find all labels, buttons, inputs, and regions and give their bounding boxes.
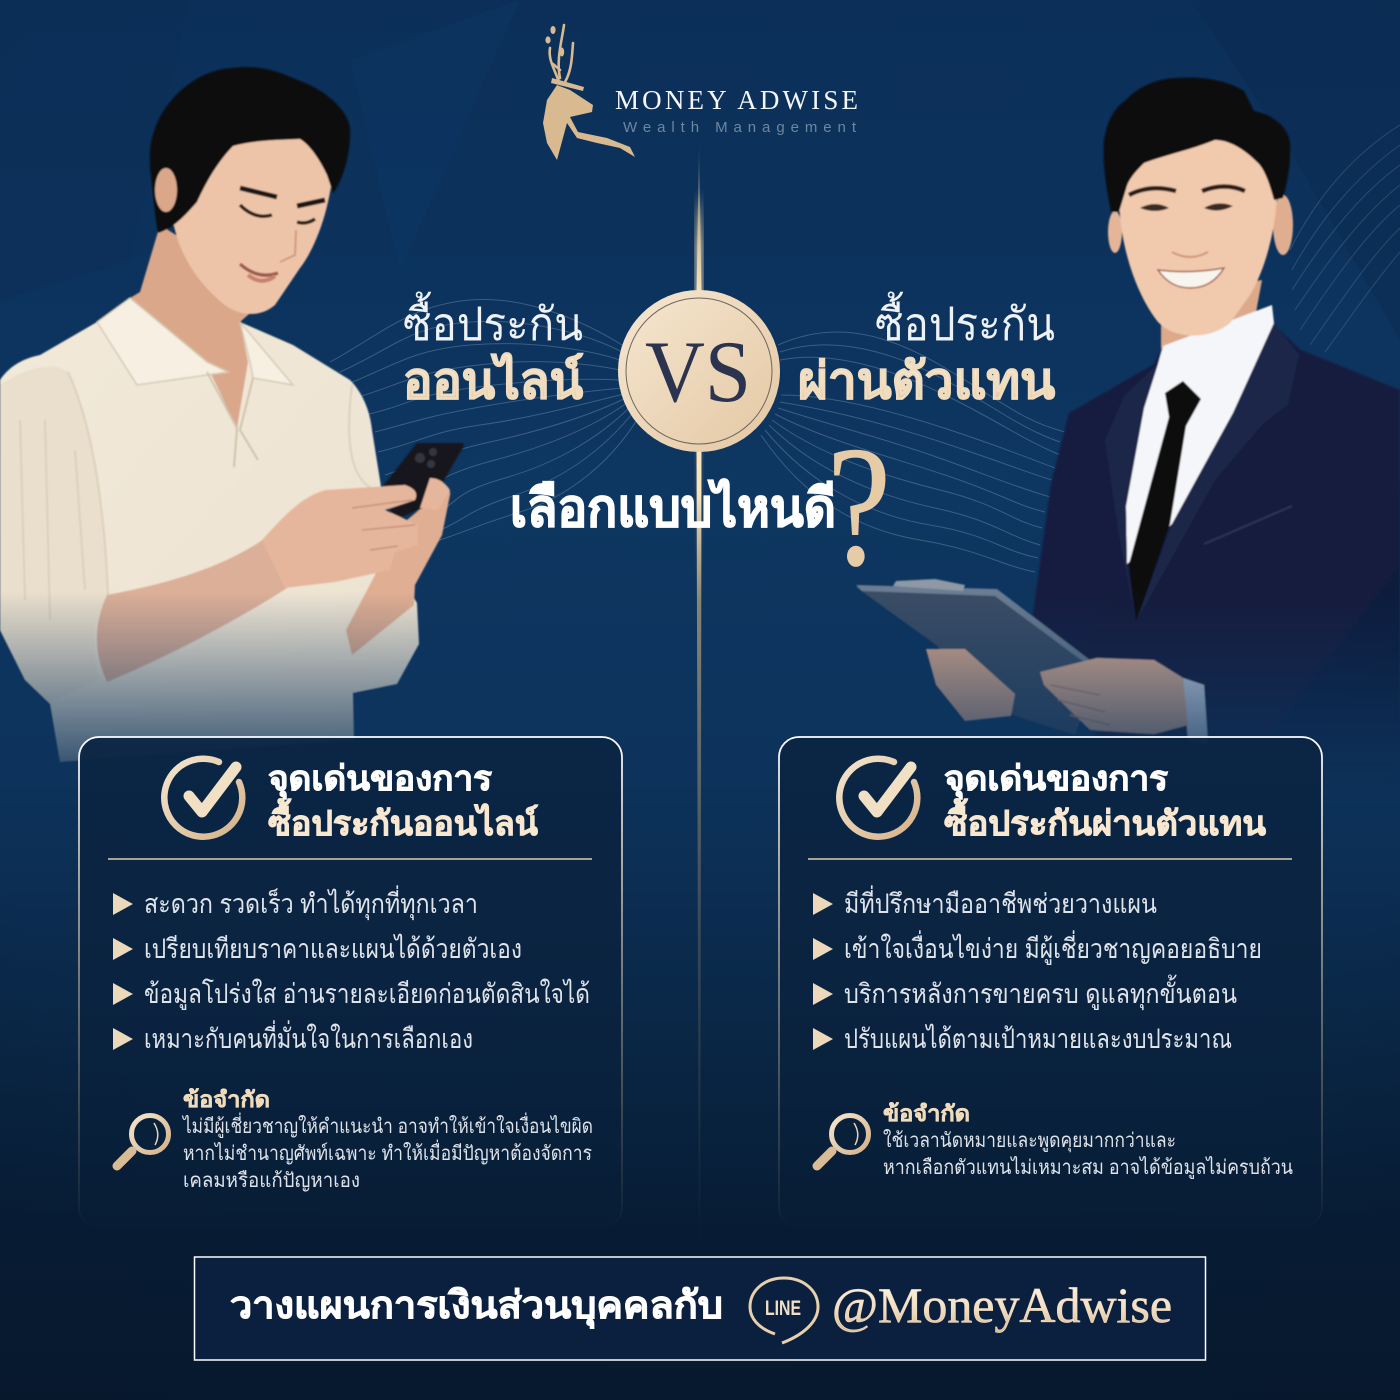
panel: online highlights — [79, 737, 622, 1227]
icon: deer — [543, 25, 635, 160]
icon: LINE bubble: LINE — [765, 1297, 801, 1320]
panel heading — [944, 760, 1266, 843]
panel heading: ซื้อประกันผ่านตัวแทน — [944, 798, 1266, 843]
headline text: เลือกแบบไหนดี — [510, 478, 836, 538]
breast pocket — [1204, 506, 1292, 544]
bullet list: บริการหลังการขายครบ ดูแลทุกขั้นตอน — [844, 974, 1237, 1011]
person: online buyer with phone — [0, 67, 464, 762]
eyebrows — [1129, 186, 1245, 195]
panel: agent highlights — [779, 737, 1322, 1227]
placket — [207, 372, 258, 467]
phone — [380, 443, 464, 520]
eyebrows — [240, 188, 325, 206]
limitations: หากไม่ชำนาญศัพท์เฉพาะ ทำให้เมื่อมีปัญหาต้องจัดการ — [183, 1139, 592, 1165]
ears — [1273, 195, 1293, 255]
chest and neck — [130, 228, 250, 427]
footer box — [194, 1257, 1206, 1360]
second hand and forearm — [346, 478, 450, 655]
shirt — [1126, 305, 1274, 564]
limitations: ข้อจำกัด — [183, 1087, 270, 1112]
bullet list — [113, 885, 590, 1054]
decorative arcs top right — [1290, 125, 1400, 352]
icon: check badge — [839, 759, 917, 837]
shirt cuff — [1183, 678, 1208, 745]
nose — [280, 230, 296, 262]
limitations — [883, 1101, 1293, 1180]
gripping hand — [262, 485, 418, 588]
logo: Money Adwise — [543, 25, 858, 160]
limitations: ข้อจำกัด — [883, 1101, 970, 1126]
tie — [1129, 381, 1201, 622]
question mark: ? — [827, 412, 891, 602]
tagline: Wealth Management — [623, 119, 857, 136]
left hand — [926, 649, 1015, 721]
bullet list — [813, 885, 1262, 1054]
question headline — [510, 412, 891, 602]
bullet list: สะดวก รวดเร็ว ทำได้ทุกที่ทุกเวลา — [144, 885, 478, 921]
right lapel — [1136, 323, 1299, 622]
panel heading: จุดเด่นของการ — [268, 760, 493, 800]
hair — [150, 67, 350, 233]
panel heading — [268, 760, 538, 843]
LINE handle: @MoneyAdwise — [832, 1277, 1172, 1333]
icon: check badge — [164, 759, 242, 837]
icon: magnifier — [817, 1116, 868, 1166]
icon: LINE bubble — [750, 1278, 818, 1343]
eyes — [1140, 203, 1233, 211]
limitations: ใช้เวลานัดหมายและพูดคุยมากกว่าและ — [883, 1129, 1176, 1153]
VS badge — [618, 290, 780, 452]
title left: buy online — [403, 291, 584, 409]
title right: buy via agent — [798, 291, 1055, 409]
limitations: หากเลือกตัวแทนไม่เหมาะสม อาจได้ข้อมูลไม่ครบถ้วน — [883, 1156, 1293, 1180]
bullet list: ปรับแผนได้ตามเป้าหมายและงบประมาณ — [844, 1024, 1232, 1054]
limitations — [181, 1087, 593, 1192]
line 1: ซื้อประกัน — [875, 291, 1055, 350]
face — [170, 130, 333, 314]
suit — [1032, 332, 1400, 756]
wordmark: MONEY ADWISE — [615, 85, 858, 115]
decorative curved lines left of VS — [330, 299, 640, 541]
nose — [1172, 252, 1208, 257]
bullet list: เปรียบเทียบราคาและแผนได้ด้วยตัวเอง — [144, 934, 522, 964]
collar — [97, 298, 228, 385]
bullet list: มีที่ปรึกษามืออาชีพช่วยวางแผน — [844, 885, 1157, 919]
person: insurance agent with clipboard — [856, 78, 1400, 800]
bullet list: เหมาะกับคนที่มั่นใจในการเลือกเอง — [144, 1020, 473, 1054]
left lapel — [1106, 368, 1155, 605]
footer call to action — [194, 1257, 1206, 1360]
icon: magnifier — [117, 1116, 168, 1166]
panel frame — [79, 737, 622, 1227]
center vertical light beam — [695, 140, 703, 1245]
line 2: ออนไลน์ — [403, 352, 584, 409]
line 1: ซื้อประกัน — [403, 291, 583, 350]
bullet list: ข้อมูลโปร่งใส อ่านรายละเอียดก่อนตัดสินใจได้ — [144, 978, 590, 1010]
panel frame — [779, 737, 1322, 1227]
hair — [1104, 78, 1290, 212]
smile — [240, 264, 278, 275]
limitations: เคลมหรือแก้ปัญหาเอง — [183, 1170, 360, 1192]
finger over phone — [420, 478, 450, 510]
panel heading: จุดเด่นของการ — [944, 760, 1169, 800]
decorative curved lines right of VS — [761, 332, 1065, 572]
neck — [1160, 279, 1263, 350]
line 2: ผ่านตัวแทน — [798, 353, 1055, 409]
VS badge: VS — [645, 324, 751, 421]
smile — [1158, 268, 1224, 288]
face — [1119, 130, 1277, 336]
bullet list: เข้าใจเงื่อนไขง่าย มีผู้เชี่ยวชาญคอยอธิบาย — [844, 930, 1262, 965]
sweater sleeve and seams — [0, 367, 106, 632]
footer text: วางแผนการเงินส่วนบุคคลกับ — [230, 1285, 723, 1329]
forearm — [97, 537, 292, 682]
sweater body — [0, 298, 419, 762]
limitations: ไม่มีผู้เชี่ยวชาญให้คำแนะนำ อาจทำให้เข้าใจเงื่อนไขผิด — [181, 1112, 593, 1139]
eyes — [240, 205, 315, 223]
ear — [155, 168, 177, 212]
right hand — [1040, 658, 1188, 734]
panel heading: ซื้อประกันออนไลน์ — [268, 798, 538, 843]
clipboard — [856, 587, 1099, 735]
